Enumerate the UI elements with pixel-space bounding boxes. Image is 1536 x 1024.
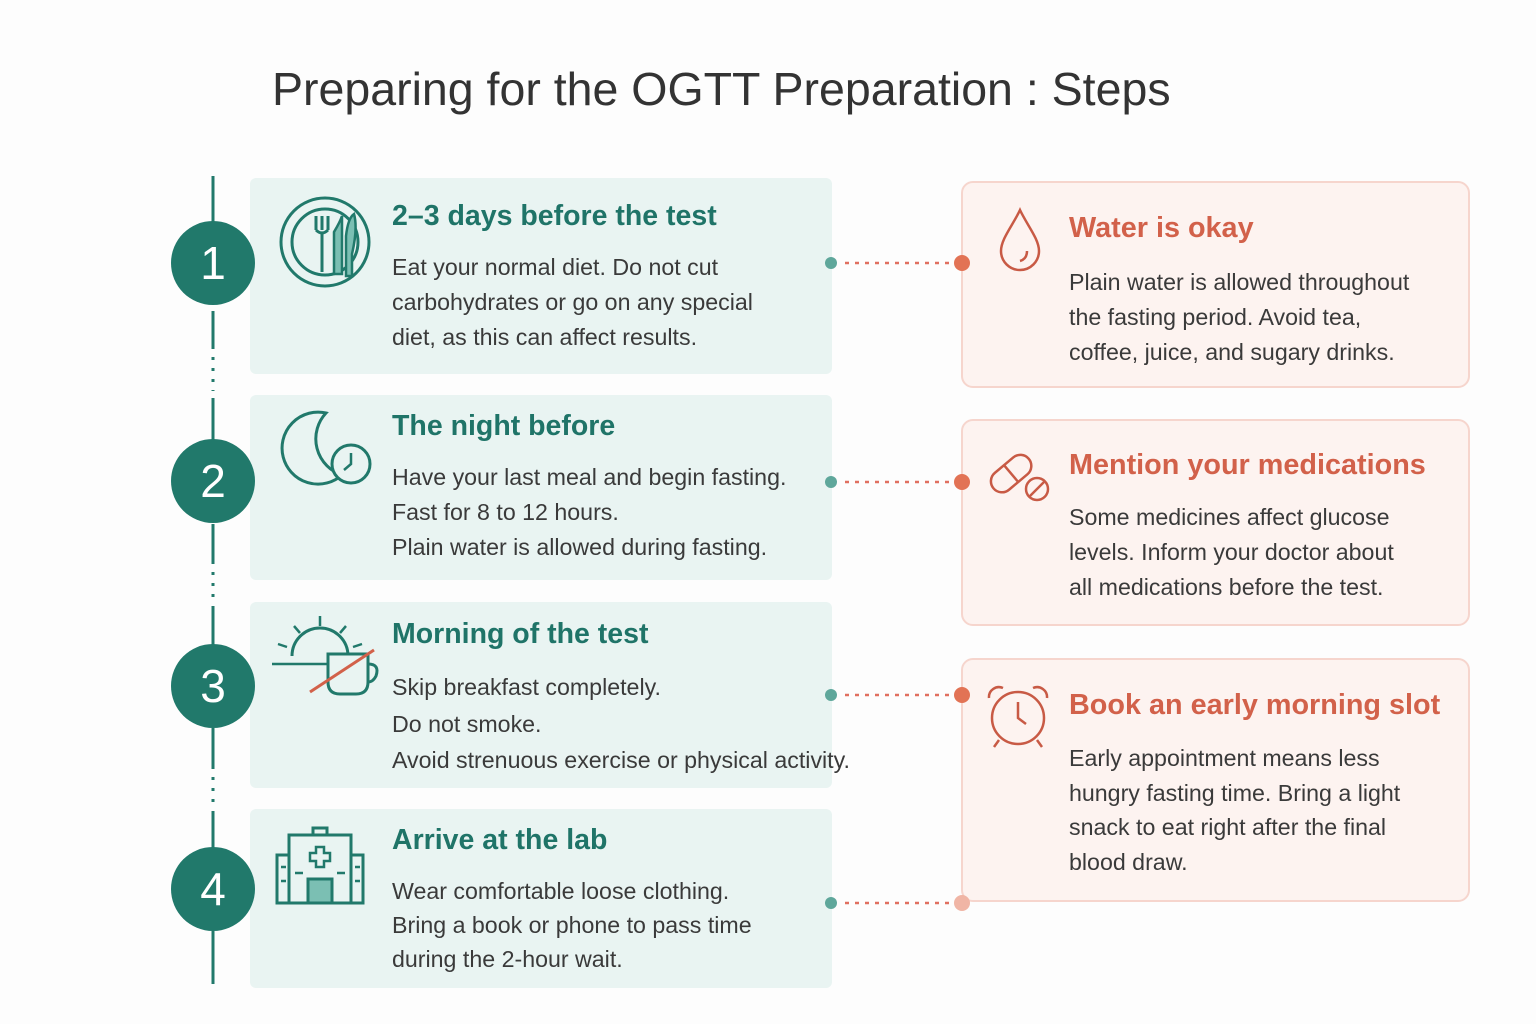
text: during the 2-hour wait. xyxy=(392,946,623,972)
text: Bring a book or phone to pass time xyxy=(392,912,752,938)
text: coffee, juice, and sugary drinks. xyxy=(1069,339,1395,365)
text xyxy=(1069,504,1394,600)
text: Wear comfortable loose clothing. xyxy=(392,878,729,904)
text: the fasting period. Avoid tea, xyxy=(1069,304,1361,330)
text: Avoid strenuous exercise or physical activity. xyxy=(392,747,850,773)
connectors xyxy=(825,255,970,911)
icon: sunrise no breakfast xyxy=(272,616,378,696)
text: all medications before the test. xyxy=(1069,574,1384,600)
text: Have your last meal and begin fasting. xyxy=(392,464,786,490)
text: 4 xyxy=(200,863,226,915)
text: diet, as this can affect results. xyxy=(392,324,697,350)
panel: early slot xyxy=(961,658,1470,902)
text: 2 xyxy=(200,455,226,507)
title: Preparing for the OGTT Preparation : Steps xyxy=(272,63,1171,115)
text: blood draw. xyxy=(1069,848,1188,874)
text: carbohydrates or go on any special xyxy=(392,289,753,315)
panel: medications xyxy=(961,419,1470,626)
text: Some medicines affect glucose xyxy=(1069,504,1390,530)
text: snack to eat right after the final xyxy=(1069,814,1386,840)
text: Early appointment means less xyxy=(1069,745,1380,771)
text xyxy=(392,878,752,972)
panel: step 2 xyxy=(250,395,832,580)
text: levels. Inform your doctor about xyxy=(1069,539,1394,565)
heading: Arrive at the lab xyxy=(392,824,607,856)
text: Do not smoke. xyxy=(392,710,542,736)
panel: step 1 xyxy=(250,178,832,374)
text: Eat your normal diet. Do not cut xyxy=(392,254,718,280)
text: Plain water is allowed during fasting. xyxy=(392,534,767,560)
text xyxy=(1069,269,1410,365)
text xyxy=(392,254,753,350)
text: 3 xyxy=(200,660,226,712)
step numbers xyxy=(171,221,255,305)
panel: water xyxy=(961,181,1470,388)
heading: Water is okay xyxy=(1069,212,1254,244)
icon: pill xyxy=(990,454,1050,502)
text xyxy=(392,464,786,560)
text xyxy=(392,674,850,773)
heading: Morning of the test xyxy=(392,618,648,650)
icon: alarm clock xyxy=(988,686,1048,748)
text: Plain water is allowed throughout xyxy=(1069,269,1409,295)
text xyxy=(1069,745,1400,874)
icon: plate xyxy=(280,196,370,288)
text: hungry fasting time. Bring a light xyxy=(1069,780,1400,806)
text: Skip breakfast completely. xyxy=(392,674,661,700)
icon: hospital xyxy=(276,826,364,904)
panel: step 4 xyxy=(250,809,832,988)
panel: step 3 xyxy=(250,602,832,788)
heading: 2–3 days before the test xyxy=(392,200,717,232)
text: Fast for 8 to 12 hours. xyxy=(392,499,619,525)
icon: drop xyxy=(1000,207,1040,272)
heading: The night before xyxy=(392,410,615,442)
timeline line xyxy=(212,176,214,984)
heading: Book an early morning slot xyxy=(1069,689,1440,721)
icon: moon clock xyxy=(280,410,372,486)
step numbers: 1 xyxy=(200,237,226,289)
heading: Mention your medications xyxy=(1069,449,1426,481)
